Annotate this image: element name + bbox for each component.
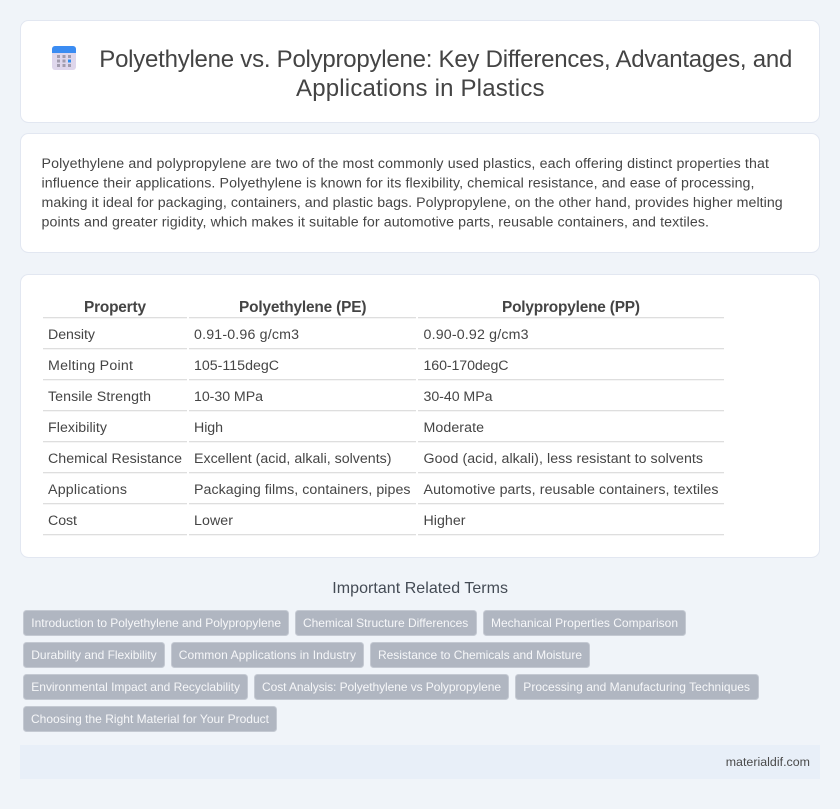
- tag: Introduction to Polyethylene and Polypropylene: [31, 616, 281, 630]
- panel: comparison table: [20, 274, 820, 558]
- tag: [24, 706, 276, 732]
- intro paragraph: making it ideal for packaging, containers, and plastic bags. Polypropylene, on the other hand, provides higher melting: [42, 195, 783, 211]
- row: tensile strength: Tensile Strength: [48, 389, 151, 405]
- footer bar: [20, 745, 820, 779]
- row: tensile strength: 10-30 MPa: [194, 389, 263, 405]
- tag: Resistance to Chemicals and Moisture: [378, 648, 582, 662]
- row: applications: Automotive parts, reusable containers, textiles: [424, 482, 718, 498]
- row: cost: Lower: [194, 513, 233, 529]
- tag: Chemical Structure Differences: [303, 616, 468, 630]
- tag: Choosing the Right Material for Your Product: [31, 712, 270, 726]
- row: cost: Higher: [424, 513, 466, 529]
- table header row: Polypropylene (PP): [502, 299, 640, 316]
- tag: [254, 674, 508, 700]
- row: density: [48, 327, 529, 343]
- tag: Cost Analysis: Polyethylene vs Polypropylene: [262, 680, 501, 694]
- intro paragraph: influence their applications. Polyethylene is known for its flexibility, chemical resistance, and ease of processing,: [42, 176, 754, 192]
- tag: Processing and Manufacturing Techniques: [523, 680, 750, 694]
- tag: [24, 674, 248, 700]
- row: flexibility: Flexibility: [48, 420, 108, 436]
- row: cost: Cost: [48, 513, 77, 529]
- panel: introduction text: [20, 134, 820, 252]
- row: density: 0.91-0.96 g/cm3: [194, 327, 299, 343]
- row: chemical resistance: [48, 451, 703, 467]
- table header row: Property: [84, 299, 146, 316]
- tag: [516, 674, 758, 700]
- intro paragraph: Polyethylene and polypropylene are two of the most commonly used plastics, each offering distinct properties that: [42, 156, 769, 172]
- row: applications: Packaging films, containers, pipes: [194, 482, 410, 498]
- title: Applications in Plastics: [296, 75, 544, 102]
- row: applications: Applications: [48, 482, 127, 498]
- row: cost: [48, 513, 466, 529]
- intro paragraph: points and greater rigidity, which makes it suitable for automotive parts, reusable containers, and textiles.: [42, 214, 709, 230]
- tag: Environmental Impact and Recyclability: [31, 680, 240, 694]
- title: Polyethylene vs. Polypropylene: Key Differences, Advantages, and: [99, 46, 792, 73]
- row: tensile strength: 30-40 MPa: [424, 389, 493, 405]
- title: [99, 46, 792, 102]
- intro paragraph: [42, 156, 783, 230]
- tag: [296, 610, 476, 636]
- heading: important related terms: Important Related Terms: [332, 580, 508, 597]
- row: chemical resistance: Excellent (acid, alkali, solvents): [194, 451, 392, 467]
- footer source: materialdif.com: [726, 755, 810, 769]
- tag: [24, 610, 288, 636]
- tag: [172, 642, 364, 668]
- tag: [484, 610, 686, 636]
- row: melting point: [48, 358, 508, 374]
- row: tensile strength: [48, 389, 493, 405]
- icon: calendar grid: [52, 46, 76, 70]
- tag: Common Applications in Industry: [179, 648, 356, 662]
- row: flexibility: Moderate: [424, 420, 484, 436]
- tag: [370, 642, 590, 668]
- related terms tags: [24, 610, 758, 732]
- tag: Durability and Flexibility: [31, 648, 157, 662]
- row: chemical resistance: Good (acid, alkali), less resistant to solvents: [424, 451, 703, 467]
- table header row: Polyethylene (PE): [239, 299, 366, 316]
- table header row: [84, 299, 640, 316]
- row: density: Density: [48, 327, 96, 343]
- panel: header: [20, 20, 820, 122]
- tag: [24, 642, 164, 668]
- row: flexibility: [48, 420, 484, 436]
- row: melting point: 160-170degC: [424, 358, 508, 374]
- row: density: 0.90-0.92 g/cm3: [424, 327, 529, 343]
- row: applications: [48, 482, 718, 498]
- row: flexibility: High: [194, 420, 223, 436]
- row: melting point: 105-115degC: [194, 358, 279, 374]
- row: melting point: Melting Point: [48, 358, 133, 374]
- row: chemical resistance: Chemical Resistance: [48, 451, 182, 467]
- tag: Mechanical Properties Comparison: [491, 616, 678, 630]
